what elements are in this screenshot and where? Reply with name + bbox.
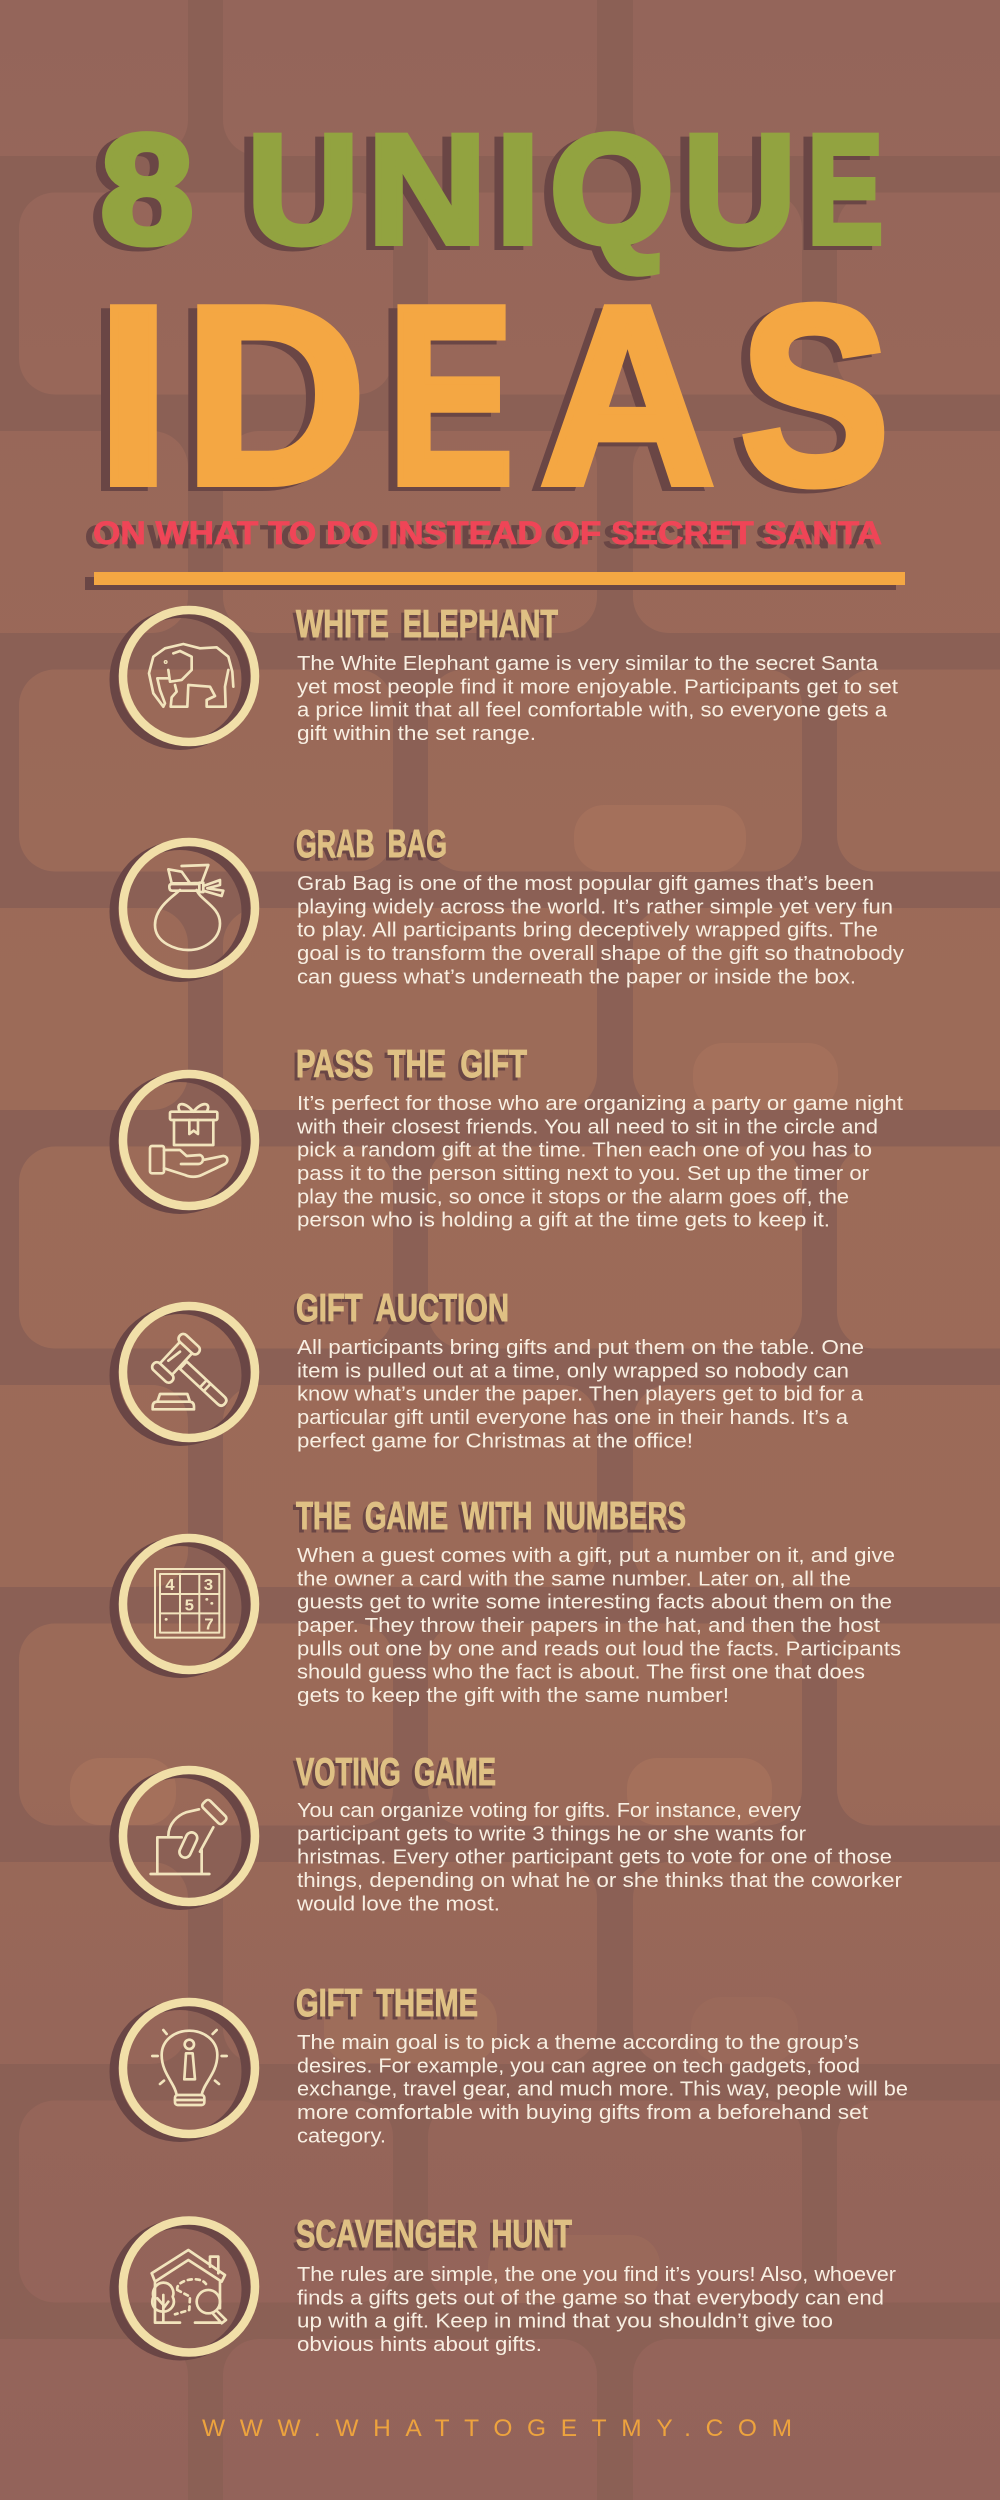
- heading: GRAB BAG: [296, 823, 447, 866]
- heading: WHITE ELEPHANT: [296, 603, 558, 646]
- body text: the owner a card with the same number. Later on, all the: [297, 1567, 851, 1590]
- heading: SCAVENGER HUNT: [296, 2213, 572, 2256]
- body text: paper. They throw their papers in the hat, and then the host: [297, 1614, 880, 1637]
- body text: would love the most.: [296, 1892, 500, 1915]
- icon: number grid in ring: 4: [165, 1577, 175, 1596]
- body text: up with a gift. Keep in mind that you shouldn’t give too: [297, 2310, 833, 2333]
- body text: gift within the set range.: [297, 722, 536, 745]
- body text: [297, 652, 898, 745]
- body text: [297, 1336, 864, 1452]
- body text: [297, 1544, 901, 1707]
- footer url: WWW.WHATTOGETMY.COM: [202, 2415, 792, 2442]
- body text: [296, 1092, 903, 1232]
- body text: hristmas. Every other participant gets to vote for one of those: [297, 1846, 892, 1869]
- section 4: gift auction: [114, 1287, 864, 1452]
- body text: The main goal is to pick a theme according to the group’s: [297, 2031, 859, 2054]
- title: ideas: S: [740, 253, 890, 537]
- body text: finds a gifts gets out of the game so that everybody can end: [297, 2286, 884, 2309]
- body text: All participants bring gifts and put them on the table. One: [297, 1336, 864, 1359]
- body text: to play. All participants bring deceptively wrapped gifts. The: [297, 919, 878, 942]
- body text: category.: [297, 2124, 386, 2147]
- body text: pulls out one by one and reads out loud the facts. Participants: [297, 1637, 901, 1660]
- icon: number grid in ring: 3: [203, 1577, 213, 1596]
- title: 8 unique: N: [367, 103, 487, 277]
- body text: [297, 2031, 908, 2147]
- body text: with their closest friends. You all need to sit in the circle and: [296, 1115, 878, 1138]
- body text: person who is holding a gift at the time gets to keep it.: [297, 1209, 830, 1232]
- title: 8 unique: 8: [100, 103, 194, 277]
- body text: pick a random gift at the time. Then each one of you has to: [297, 1139, 872, 1162]
- title underline bar: [85, 572, 905, 590]
- body text: When a guest comes with a gift, put a number on it, and give: [297, 1544, 895, 1567]
- section 7: gift theme: [114, 1982, 908, 2147]
- body text: particular gift until everyone has one in their hands. It’s a: [297, 1406, 849, 1429]
- body text: The rules are simple, the one you find it’s yours! Also, whoever: [297, 2263, 896, 2286]
- body text: gets to keep the gift with the same number!: [297, 1684, 729, 1707]
- body text: exchange, travel gear, and much more. This way, people will be: [297, 2078, 908, 2101]
- body text: playing widely across the world. It’s rather simple yet very fun: [297, 895, 893, 918]
- title: 8 unique: Q: [550, 103, 674, 277]
- title: ideas: I: [96, 253, 170, 537]
- icon: house search in ring: [114, 2220, 255, 2356]
- section 1: white elephant: [114, 603, 898, 746]
- body text: know what’s under the paper. Then players get to bid for a: [297, 1383, 864, 1406]
- body text: play the music, so once it stops or the alarm goes off, the: [297, 1185, 849, 1208]
- title: 8 unique: U: [683, 103, 796, 277]
- heading: GIFT THEME: [296, 1982, 478, 2025]
- body text: obvious hints about gifts.: [297, 2333, 542, 2356]
- body text: can guess what’s underneath the paper or inside the box.: [297, 965, 856, 988]
- title: ideas: A: [540, 253, 715, 537]
- body text: should guess who the fact is about. The first one that does: [297, 1661, 865, 1684]
- heading: VOTING GAME: [296, 1751, 496, 1794]
- heading: PASS THE GIFT: [296, 1043, 527, 1086]
- body text: [297, 872, 905, 988]
- icon: sack in ring: [114, 842, 255, 978]
- title: 8 unique: E: [807, 103, 883, 277]
- title: ideas: D: [184, 253, 366, 537]
- body text: more comfortable with buying gifts from a beforehand set: [297, 2101, 868, 2124]
- title: ideas: E: [388, 253, 514, 537]
- section 3: pass the gift: [114, 1043, 903, 1232]
- body text: You can organize voting for gifts. For instance, every: [297, 1799, 802, 1822]
- icon: light bulb in ring: [114, 2002, 255, 2138]
- heading: THE GAME WITH NUMBERS: [296, 1495, 686, 1538]
- body text: a price limit that all feel comfortable with, so everyone gets a: [297, 699, 888, 722]
- body text: desires. For example, you can agree on tech gadgets, food: [297, 2054, 860, 2077]
- body text: It’s perfect for those who are organizing a party or game night: [297, 1092, 903, 1115]
- body text: participant gets to write 3 things he or she wants for: [297, 1822, 806, 1845]
- title: 8 unique: I: [496, 103, 540, 277]
- section 6: voting game: [114, 1751, 902, 1915]
- icon: ballot box in ring: [114, 1770, 255, 1906]
- body text: pass it to the person sitting next to you. Set up the timer or: [297, 1162, 869, 1185]
- body text: goal is to transform the overall shape of the gift so thatnobody: [297, 942, 905, 965]
- icon: number grid in ring: 5: [184, 1598, 194, 1617]
- section 5: the game with numbers: [114, 1495, 901, 1707]
- icon: elephant in ring: [114, 610, 255, 746]
- icon: number grid in ring: 7: [204, 1616, 214, 1635]
- title: 8 unique: U: [247, 103, 359, 277]
- body text: yet most people find it more enjoyable. Participants get to set: [297, 675, 898, 698]
- section 8: scavenger hunt: [114, 2213, 896, 2356]
- icon: gavel in ring: [114, 1306, 255, 1442]
- body text: things, depending on what he or she thinks that the coworker: [297, 1869, 902, 1892]
- body text: item is pulled out at a time, only wrapped so nobody can: [297, 1359, 849, 1382]
- heading: GIFT AUCTION: [296, 1287, 509, 1330]
- body text: [296, 1799, 902, 1915]
- body text: perfect game for Christmas at the office!: [297, 1429, 693, 1452]
- body text: [297, 2263, 896, 2356]
- section 2: grab bag: [114, 823, 905, 988]
- body text: Grab Bag is one of the most popular gift games that’s been: [297, 872, 874, 895]
- body text: guests get to write some interesting facts about them on the: [297, 1591, 892, 1614]
- body text: The White Elephant game is very similar to the secret Santa: [297, 652, 879, 675]
- icon: number grid in ring: [114, 1538, 255, 1674]
- icon: gift on hand in ring: [114, 1074, 255, 1210]
- subtitle: ON WHAT TO DO INSTEAD OF SECRET SANTA: [93, 515, 882, 551]
